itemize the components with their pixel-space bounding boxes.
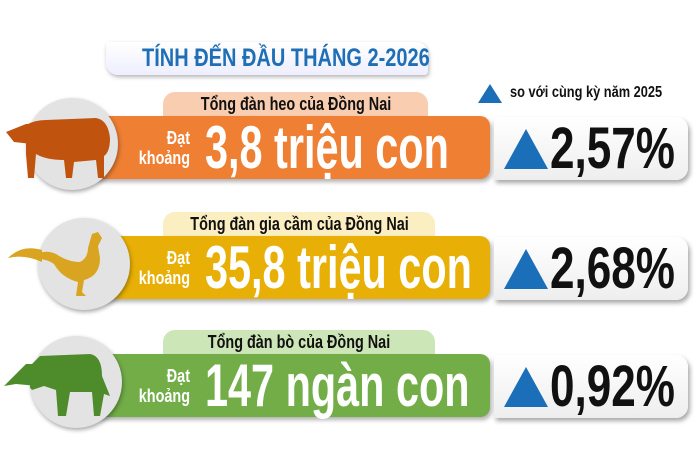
bar <box>95 354 490 417</box>
icon circle: pig <box>26 98 118 190</box>
tab <box>163 330 435 354</box>
bar: 147 ngàn con <box>205 352 470 419</box>
bar: 35,8 triệu con <box>205 234 472 301</box>
bar: Đạt <box>167 128 190 148</box>
change box <box>494 355 688 418</box>
change box <box>494 117 688 180</box>
pig snout overflow <box>6 124 28 144</box>
icon circle: rooster <box>38 218 130 310</box>
title: TÍNH ĐẾN ĐẦU THÁNG 2-2026 <box>142 44 430 72</box>
panel: pig <box>24 92 693 194</box>
bar <box>95 236 490 299</box>
tab <box>163 212 435 236</box>
bar: 3,8 triệu con <box>205 114 449 181</box>
bar: khoảng <box>139 148 190 168</box>
change box: 0,92% <box>550 354 675 419</box>
change box <box>494 237 688 300</box>
change box: 2,57% <box>550 116 675 181</box>
tab: Tổng đàn bò của Đồng Nai <box>208 332 390 352</box>
change box: 2,68% <box>550 236 675 301</box>
icon circle: cow <box>30 336 122 428</box>
tab: Tổng đàn gia cầm của Đồng Nai <box>190 214 409 234</box>
bar <box>95 116 490 179</box>
bar: khoảng <box>139 386 190 406</box>
bar: Đạt <box>167 366 190 386</box>
bar: khoảng <box>139 268 190 288</box>
panel: poultry <box>36 212 693 314</box>
legend: so với cùng kỳ năm 2025 <box>510 84 662 101</box>
panel: cattle <box>28 330 693 432</box>
tab: Tổng đàn heo của Đồng Nai <box>200 94 391 114</box>
tab <box>163 92 428 116</box>
bar: Đạt <box>167 248 190 268</box>
